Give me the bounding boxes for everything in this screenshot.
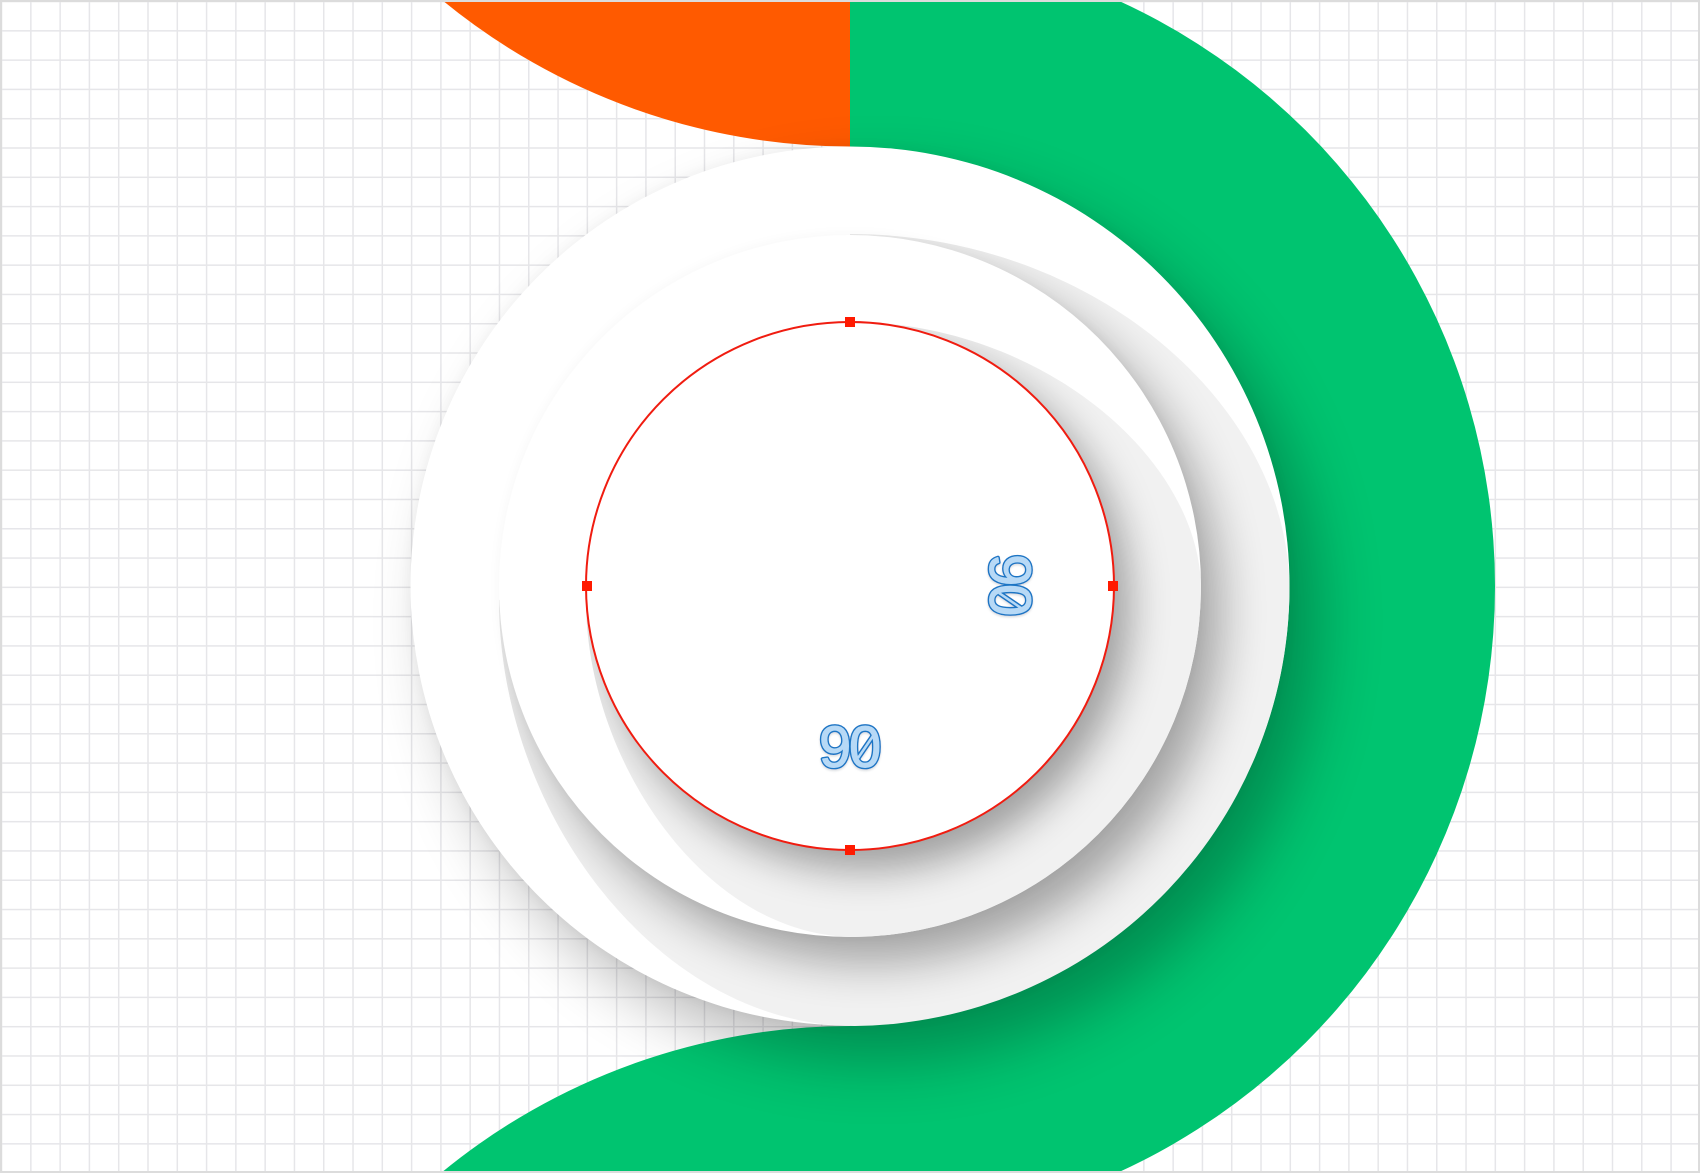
inner grey crescent: [586, 322, 1201, 937]
outer circle halo: [409, 145, 1291, 1027]
outer grey crescent: [499, 234, 1290, 1026]
red anchor points: [582, 317, 1118, 855]
outer white circle: [410, 146, 1290, 1026]
label: upright 90: 90: [819, 715, 881, 780]
inner circle with red outline: [586, 322, 1114, 850]
label: upright 90: 90: [819, 715, 881, 780]
middle circle halo: [498, 234, 1202, 938]
inner circle shadow: [602, 342, 1130, 870]
outer circle drop shadow: [438, 180, 1318, 1060]
orange arc segment: [442, 0, 850, 146]
middle circle shadow: [519, 261, 1221, 963]
label: rotated 90: 90: [977, 554, 1042, 616]
middle white circle: [499, 235, 1201, 937]
label: rotated 90: 90: [977, 554, 1042, 616]
green S-shaped ring: [441, 0, 1495, 1173]
